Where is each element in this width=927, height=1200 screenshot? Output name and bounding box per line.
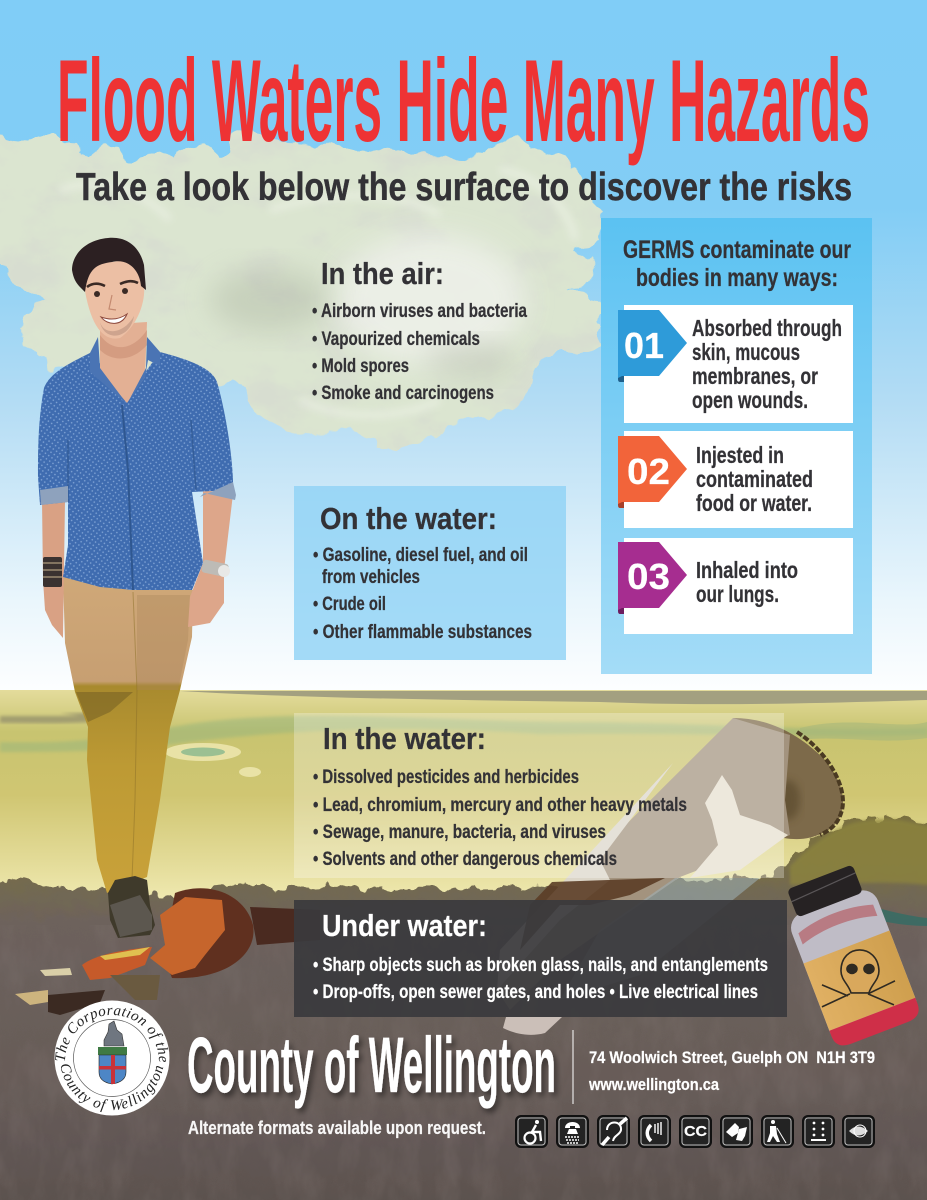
- divider: [572, 1030, 574, 1104]
- contact details: [588, 1048, 875, 1094]
- list: • Sewage, manure, bacteria, and viruses: [313, 822, 606, 843]
- face: [84, 261, 144, 339]
- icon: blind person: [762, 1116, 793, 1147]
- list: • Lead, chromium, mercury and other heavy metals: [313, 795, 687, 816]
- list: [312, 301, 527, 404]
- watch: [201, 559, 230, 577]
- list: [313, 767, 687, 870]
- card 02: contaminated: [696, 466, 813, 492]
- seal text: The Corporation of the: [55, 1008, 168, 1062]
- heading: GERMS contaminate our: [623, 236, 851, 264]
- flood water surface: [0, 690, 927, 900]
- left arm: [42, 500, 65, 638]
- card 02: [618, 431, 853, 528]
- icon: sign language: [721, 1116, 752, 1147]
- heading: Under water:: [322, 908, 487, 943]
- list: • Sharp objects such as broken glass, nails, and entanglements: [313, 955, 768, 976]
- rusted pipe: [497, 718, 843, 1035]
- card 03: Inhaled into: [696, 557, 798, 583]
- hair: [72, 238, 146, 292]
- list: • Crude oil: [313, 594, 386, 615]
- man walking: [38, 238, 236, 938]
- icon: low vision: [843, 1116, 874, 1147]
- legs and trousers: [63, 577, 193, 893]
- card 01: skin, mucous: [692, 339, 800, 365]
- card 01: 01: [624, 325, 664, 366]
- heading: [623, 236, 851, 292]
- list: [313, 955, 768, 1003]
- broken bottle: [15, 888, 320, 1015]
- seal text: County of Wellington: [61, 1064, 164, 1112]
- card 01: Absorbed through: [692, 315, 842, 341]
- panel: germs: [601, 218, 872, 674]
- crest: [98, 1021, 127, 1084]
- contact details: 74 Woolwich Street, Guelph ON N1H 3T9: [589, 1048, 875, 1067]
- list: • Dissolved pesticides and herbicides: [313, 767, 579, 788]
- skull and crossbones: [822, 950, 895, 1007]
- soil ground: [0, 817, 927, 1200]
- list: • Airborn viruses and bacteria: [312, 301, 527, 322]
- county seal: [54, 1000, 170, 1116]
- heading: bodies in many ways:: [636, 264, 838, 292]
- contact details: www.wellington.ca: [588, 1075, 719, 1094]
- icon: tty: [557, 1116, 588, 1147]
- list: • Drop-offs, open sewer gates, and holes • Live electrical lines: [313, 982, 758, 1003]
- list: • Other flammable substances: [313, 622, 532, 643]
- accessibility icons: [516, 1116, 874, 1147]
- panel: in the water: [294, 713, 784, 878]
- poison jar: [777, 861, 922, 1049]
- heading: On the water:: [320, 501, 497, 536]
- icon: closed captions: [680, 1116, 711, 1147]
- list: • Vapourized chemicals: [312, 329, 480, 350]
- heading: In the air:: [321, 256, 444, 291]
- boot: [108, 876, 155, 938]
- icon: volume phone: [639, 1116, 670, 1147]
- right arm: [188, 490, 233, 627]
- sky background: [0, 0, 927, 692]
- card 02: Injested in: [696, 442, 784, 468]
- eyes and smile: [87, 281, 138, 336]
- list: from vehicles: [322, 567, 420, 588]
- card 02: food or water.: [696, 490, 812, 516]
- list: • Smoke and carcinogens: [312, 383, 494, 404]
- neck: [100, 322, 147, 403]
- bracelets: [43, 557, 62, 587]
- seal text: [55, 1008, 168, 1112]
- smoke cloud: [0, 131, 604, 450]
- panel: in the air: [312, 256, 527, 404]
- list: [313, 545, 532, 643]
- heading: In the water:: [323, 721, 486, 756]
- card 02: 02: [627, 451, 670, 492]
- card 01: open wounds.: [692, 387, 808, 413]
- collar: [90, 337, 160, 404]
- card 01: membranes, or: [692, 363, 818, 389]
- shirt: [38, 352, 233, 590]
- icon: wheelchair: [516, 1116, 547, 1147]
- list: • Solvents and other dangerous chemicals: [313, 849, 617, 870]
- panel: under water: [294, 900, 787, 1017]
- icon: closed captions: CC: [684, 1123, 707, 1140]
- card 03: our lungs.: [696, 581, 779, 607]
- panel: on the water: [294, 486, 566, 660]
- list: • Mold spores: [312, 356, 409, 377]
- alternate formats note: Alternate formats available upon request.: [188, 1118, 486, 1138]
- card 03: [618, 538, 853, 634]
- icon: hearing: [598, 1116, 629, 1147]
- list: • Gasoline, diesel fuel, and oil: [313, 545, 528, 566]
- card 03: 03: [627, 556, 670, 597]
- icon: braille: [803, 1116, 834, 1147]
- card 01: [618, 305, 853, 423]
